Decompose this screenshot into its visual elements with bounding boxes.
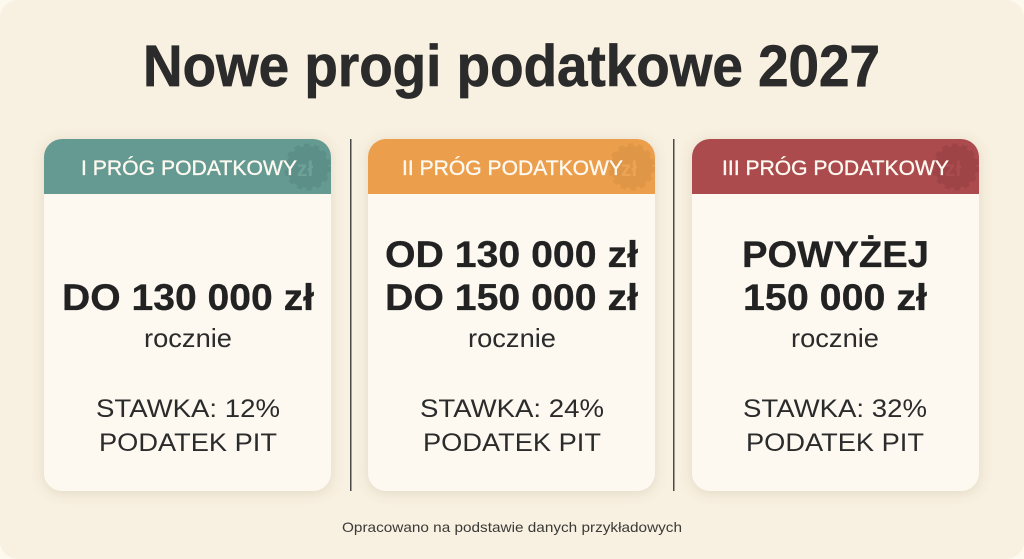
period: rocznie	[144, 323, 232, 353]
divider: second	[673, 139, 674, 491]
tax name: PODATEK PIT	[423, 429, 601, 457]
rate: STAWKA: 32%	[743, 395, 927, 423]
period: rocznie	[791, 323, 879, 353]
tax name: PODATEK PIT	[99, 429, 277, 457]
header label: III PRÓG PODATKOWY	[722, 157, 949, 180]
header: II próg	[368, 139, 655, 194]
icon: gear with zł: zł	[945, 158, 961, 181]
threshold amount: POWYŻEJ	[742, 234, 929, 275]
panel: II próg podatkowy: DO 150 000 zł	[385, 277, 638, 318]
panel: II próg podatkowy	[368, 139, 655, 491]
icon: gear with zł	[286, 145, 330, 189]
footnote: Opracowano na podstawie danych przykładowych	[342, 519, 682, 535]
header label: I PRÓG PODATKOWY	[81, 157, 297, 180]
header label: II PRÓG PODATKOWY	[402, 157, 623, 180]
icon: gear with zł: zł	[621, 158, 637, 181]
divider: first	[350, 139, 352, 491]
title: Nowe progi podatkowe 2027	[143, 34, 880, 99]
panel: III próg podatkowy	[692, 139, 979, 491]
threshold amount: OD 130 000 zł	[385, 234, 638, 275]
icon: gear with zł	[610, 145, 654, 189]
header: I próg	[44, 139, 331, 194]
icon: gear with zł	[934, 145, 978, 189]
rate: STAWKA: 24%	[420, 395, 604, 423]
tax name: PODATEK PIT	[746, 429, 924, 457]
panel: III próg podatkowy: 150 000 zł	[743, 277, 927, 318]
header: III próg	[692, 139, 979, 194]
panel: I próg podatkowy	[44, 139, 331, 491]
period: rocznie	[468, 323, 556, 353]
rate: STAWKA: 12%	[96, 395, 280, 423]
icon: gear with zł: zł	[297, 158, 313, 181]
threshold amount: DO 130 000 zł	[62, 277, 314, 318]
